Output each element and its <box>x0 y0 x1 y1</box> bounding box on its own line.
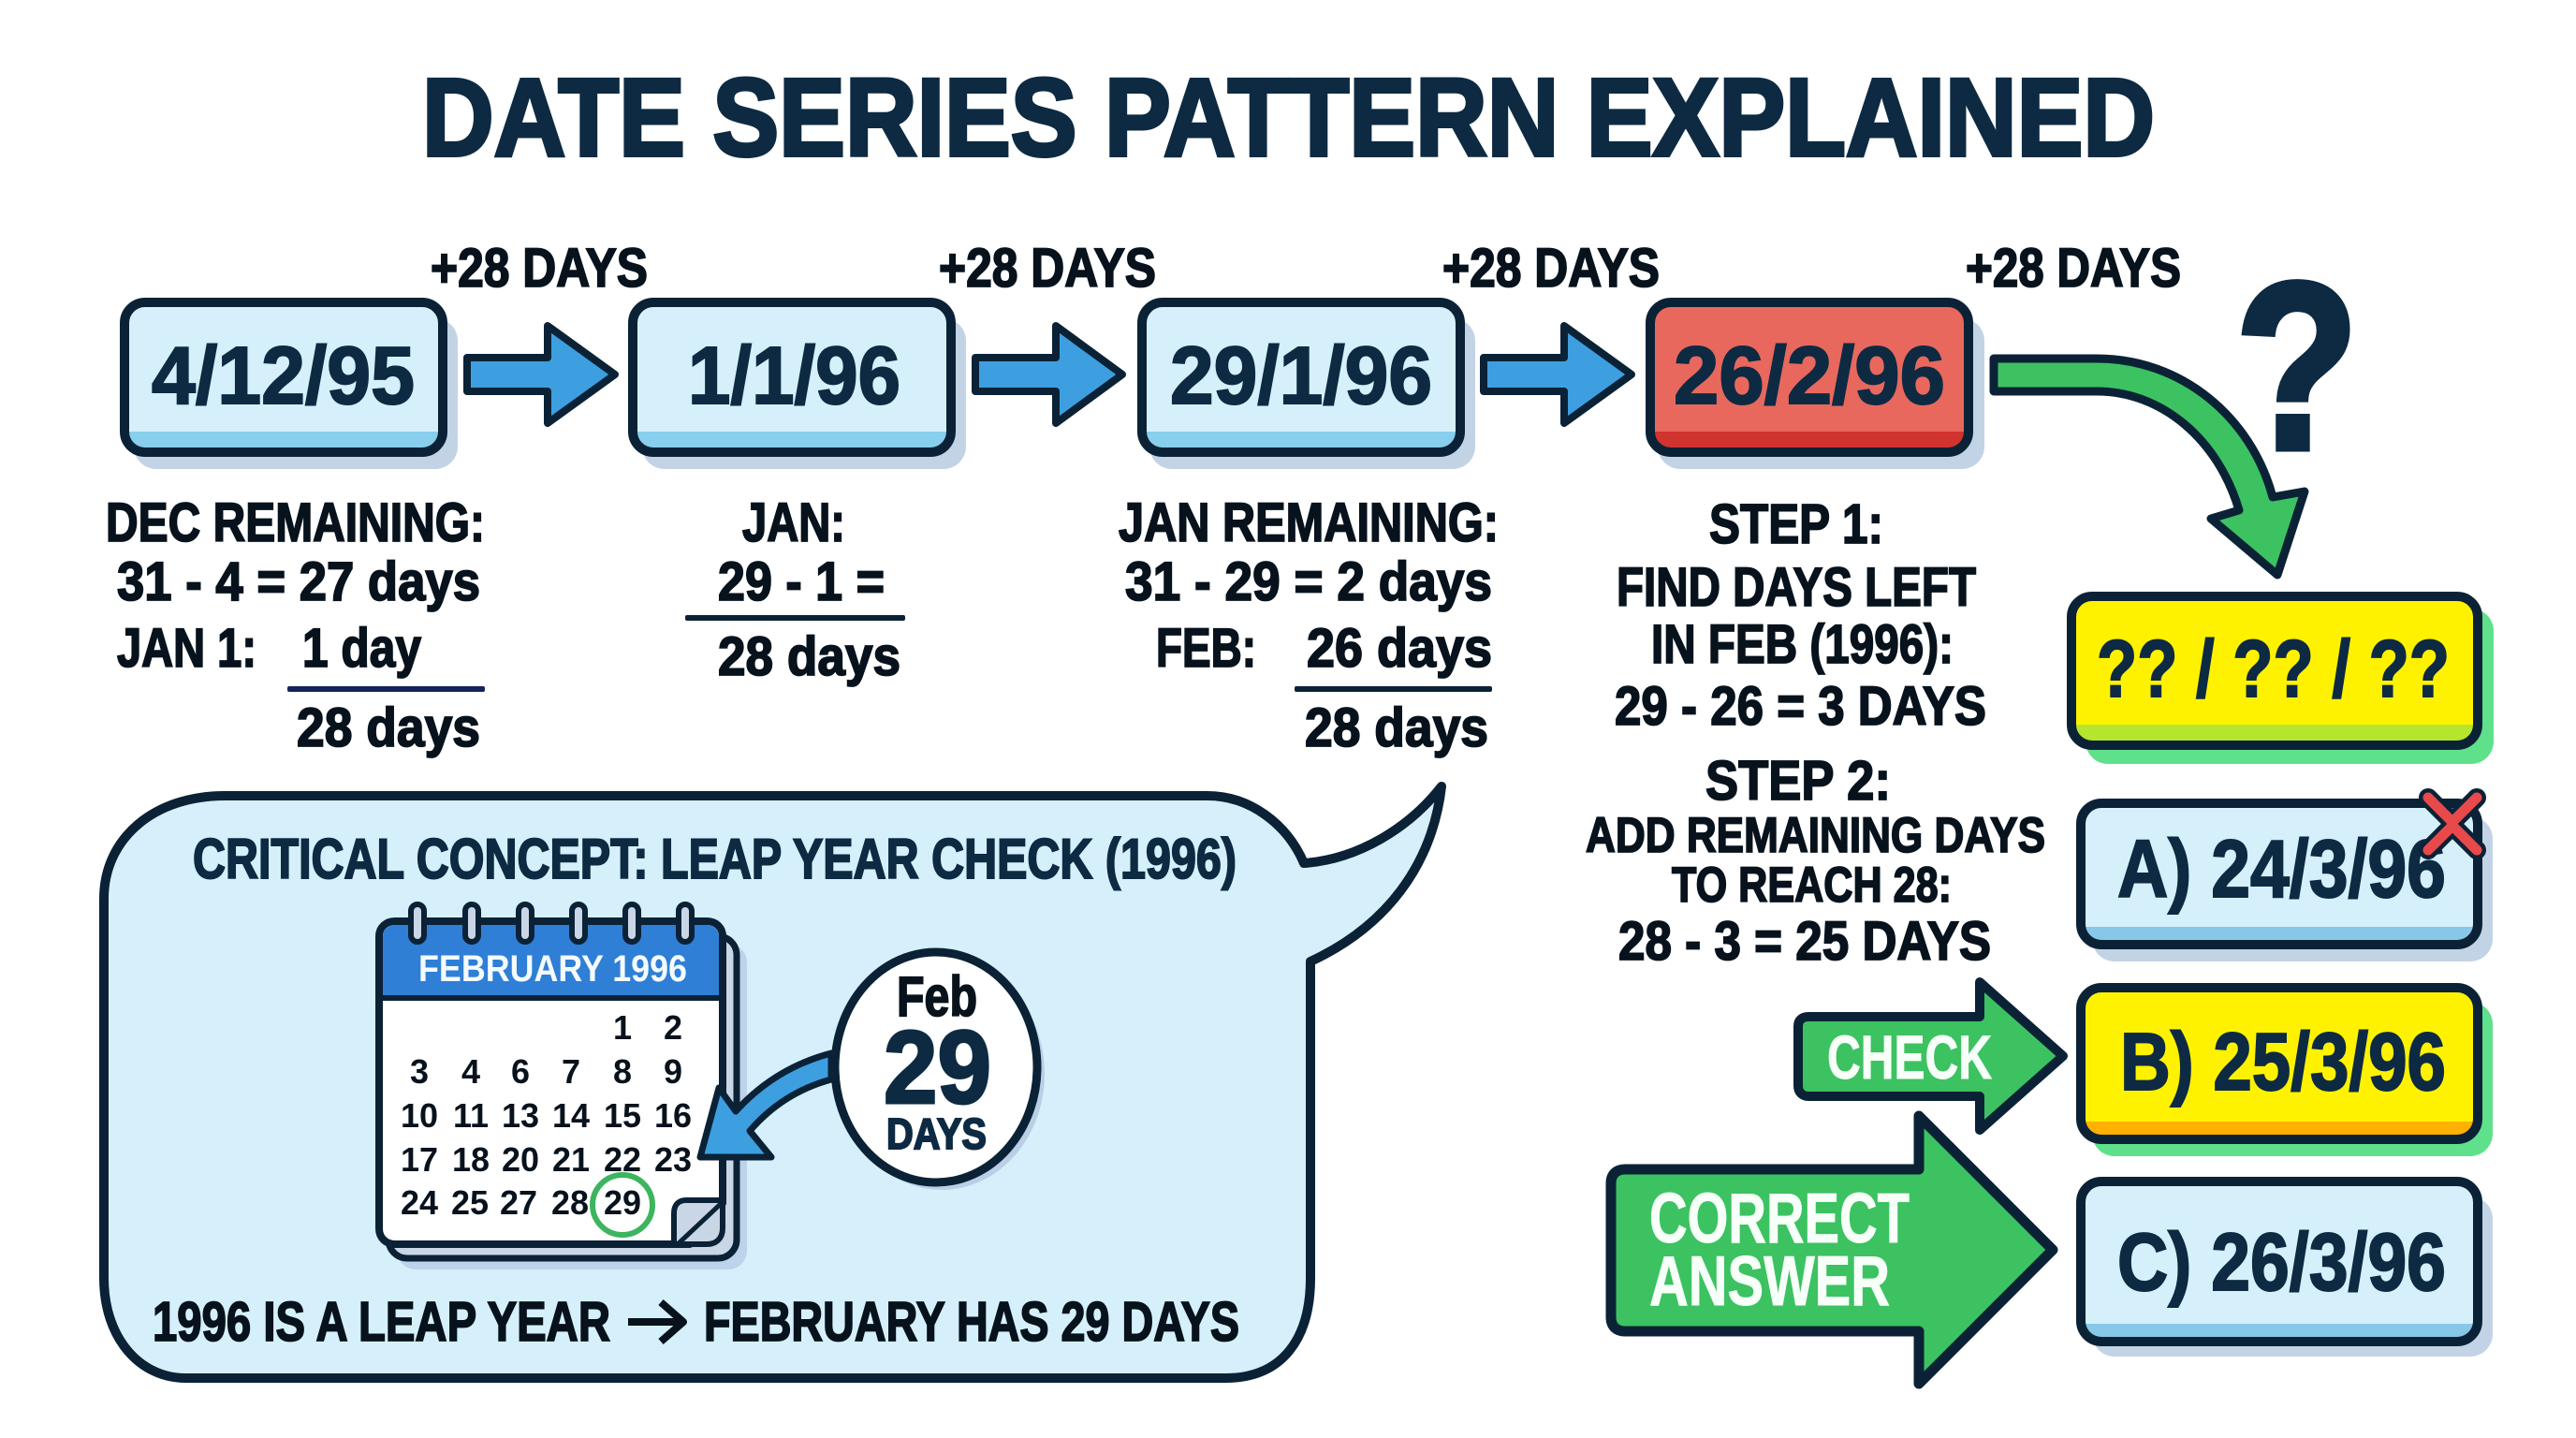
bubble conclusion text: FEBRUARY HAS 29 DAYS <box>704 1291 1239 1353</box>
calendar dates: 20 <box>502 1140 539 1179</box>
arrow: check: CHECK <box>1827 1022 1992 1092</box>
calculation: steps 1 and 2: TO REACH 28: <box>1672 858 1952 913</box>
calendar dates: 8 <box>613 1052 632 1091</box>
date box 4/12/95: 4/12/95 <box>152 330 415 421</box>
calculation: Dec to Jan: 1 day <box>302 618 421 679</box>
calendar dates: 4 <box>461 1052 480 1091</box>
calculation: Jan to Feb: JAN REMAINING: <box>1119 492 1499 553</box>
label: +28 days 1: +28 DAYS <box>431 238 648 299</box>
icon: question mark: ? <box>2235 233 2359 499</box>
calendar dates: 23 <box>654 1140 692 1179</box>
label: +28 days 3: +28 DAYS <box>1442 238 1660 299</box>
calendar dates: 18 <box>452 1140 490 1179</box>
arrow: second step <box>975 326 1122 423</box>
page curl <box>674 1200 723 1244</box>
badge: Feb 29 days: 29 <box>884 1010 991 1125</box>
date box 1/1/96: 1/1/96 <box>688 330 900 421</box>
answer option A: A) 24/3/96 <box>2117 824 2446 915</box>
bubble conclusion text <box>153 1291 1239 1353</box>
calculation: steps 1 and 2: 29 - 26 = 3 DAYS <box>1615 676 1986 737</box>
bubble conclusion text: 1996 IS A LEAP YEAR <box>153 1291 610 1353</box>
calendar dates: 28 <box>551 1183 589 1222</box>
calendar dates: 11 <box>453 1096 489 1135</box>
date box 4/12/95 <box>124 302 458 469</box>
calendar dates: 29 <box>604 1183 641 1222</box>
calendar dates: 15 <box>604 1096 641 1135</box>
date box 1/1/96 <box>633 302 966 469</box>
calculation: Dec to Jan: 31 - 4 = 27 days <box>117 551 480 612</box>
calendar dates: 3 <box>410 1052 429 1091</box>
answer option C: C) 26/3/96 <box>2117 1217 2446 1308</box>
calendar dates <box>401 1008 692 1222</box>
calculation: steps 1 and 2: STEP 2: <box>1705 750 1891 812</box>
calculation: steps 1 and 2: IN FEB (1996): <box>1651 614 1954 675</box>
calculation: steps 1 and 2: STEP 1: <box>1709 493 1883 555</box>
calendar dates: 17 <box>401 1140 438 1179</box>
calculation: Jan to Feb <box>1119 492 1499 758</box>
calculation: Jan to Feb: 31 - 29 = 2 days <box>1125 551 1492 612</box>
date box 29/1/96 <box>1142 302 1475 469</box>
unknown date box <box>2071 596 2494 764</box>
calendar dates: 10 <box>401 1096 438 1135</box>
panel: leap year speech bubble <box>104 786 1442 1378</box>
icon: red cross <box>2428 798 2477 850</box>
arrow: first step <box>467 326 615 423</box>
answer option B (correct): B) 25/3/96 <box>2120 1017 2446 1108</box>
arrow: curved green to unknown date <box>1994 359 2305 575</box>
answer option C <box>2081 1181 2493 1357</box>
calendar rings <box>411 904 692 942</box>
badge: Feb 29 days: DAYS <box>886 1109 987 1158</box>
calculation: Jan <box>685 492 905 687</box>
answer option B (correct) <box>2081 988 2493 1156</box>
calculation: Jan to Feb: 26 days <box>1307 618 1492 679</box>
calendar dates: 21 <box>552 1140 590 1179</box>
date box 29/1/96: 29/1/96 <box>1170 330 1432 421</box>
calculation: steps 1 and 2: 28 - 3 = 25 DAYS <box>1618 911 1991 972</box>
calendar dates: 6 <box>511 1052 530 1091</box>
calendar dates: 13 <box>502 1096 539 1135</box>
calendar dates: 24 <box>401 1183 438 1222</box>
calculation: Dec to Jan <box>106 492 485 758</box>
calculation: Dec to Jan: 28 days <box>297 697 480 758</box>
arrow: check <box>1798 982 2063 1130</box>
green circle around 29 <box>593 1175 652 1235</box>
arrow: from Feb 29 badge to calendar <box>700 1053 831 1157</box>
arrow: correct answer: ANSWER <box>1649 1241 1890 1320</box>
calendar dates: 9 <box>664 1052 682 1091</box>
answer option A <box>2081 798 2493 961</box>
date box 26/2/96 (red): 26/2/96 <box>1674 330 1945 421</box>
calendar dates: 14 <box>552 1096 590 1135</box>
calendar dates: 27 <box>500 1183 537 1222</box>
calculation: Jan to Feb: 28 days <box>1305 697 1488 758</box>
calendar header text: FEBRUARY 1996 <box>418 948 687 990</box>
unknown date box: ?? / ?? / ?? <box>2097 624 2450 714</box>
label: +28 days 4: +28 DAYS <box>1966 238 2181 299</box>
calendar dates: 16 <box>654 1096 692 1135</box>
icon: calendar February 1996 <box>379 904 747 1269</box>
badge: Feb 29 days: Feb <box>897 965 977 1028</box>
calculation: steps 1 and 2: ADD REMAINING DAYS <box>1586 808 2045 863</box>
calendar dates: 7 <box>562 1052 580 1091</box>
calendar dates: 22 <box>604 1140 641 1179</box>
label: +28 days 2: +28 DAYS <box>939 238 1156 299</box>
calculation: Dec to Jan: JAN 1: <box>117 618 256 679</box>
calculation: steps 1 and 2 <box>1586 493 2045 972</box>
calculation: Jan: 28 days <box>718 626 900 687</box>
calculation: Jan: 29 - 1 = <box>718 551 885 612</box>
calendar dates: 25 <box>451 1183 489 1222</box>
date box 26/2/96 (red) <box>1650 302 1984 469</box>
arrow: correct answer: CORRECT <box>1649 1179 1910 1257</box>
badge: Feb 29 days <box>835 952 1045 1190</box>
calendar dates: 2 <box>664 1008 682 1047</box>
arrow: third step <box>1484 326 1632 423</box>
calendar dates: 1 <box>613 1008 632 1047</box>
calculation: Jan: JAN: <box>742 492 845 553</box>
title: DATE SERIES PATTERN EXPLAINED <box>422 56 2155 180</box>
calculation: Jan to Feb: FEB: <box>1156 618 1256 679</box>
bubble heading: CRITICAL CONCEPT: LEAP YEAR CHECK (1996) <box>193 828 1237 890</box>
arrow: correct answer <box>1611 1116 2053 1384</box>
calculation: steps 1 and 2: FIND DAYS LEFT <box>1617 557 1976 618</box>
calculation: Dec to Jan: DEC REMAINING: <box>106 492 485 553</box>
